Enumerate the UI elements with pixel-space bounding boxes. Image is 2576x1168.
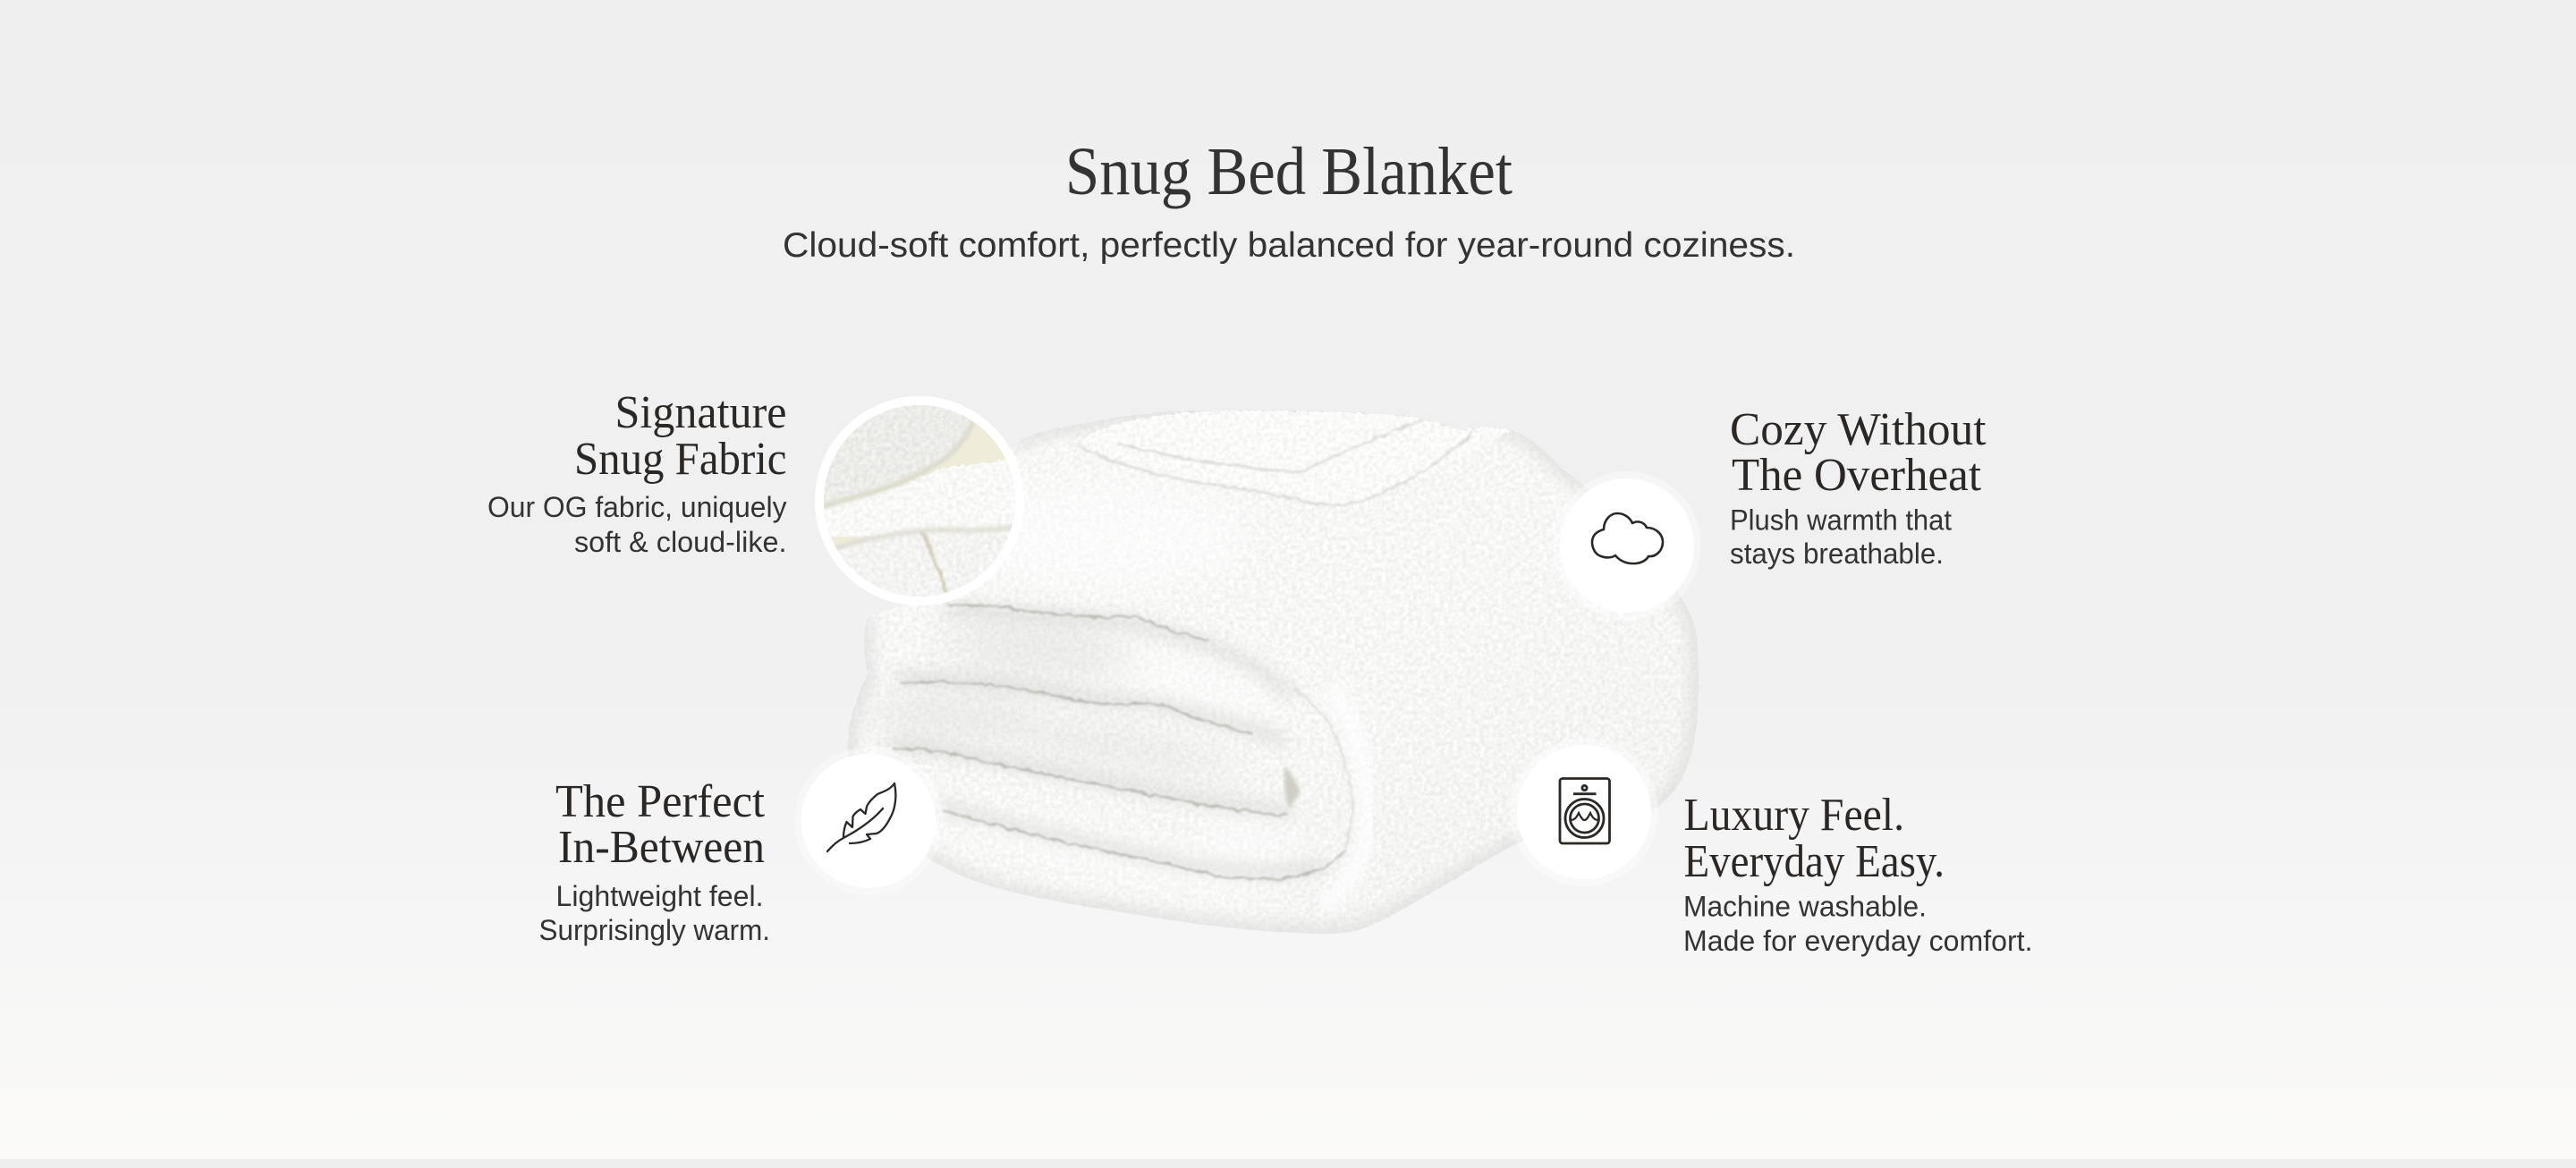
panel: the perfect in-between xyxy=(538,747,943,946)
icon: cloud xyxy=(1553,471,1701,620)
heading: The Perfect xyxy=(555,776,766,827)
top flap of blanket xyxy=(1079,410,1512,504)
description xyxy=(1683,891,2032,957)
heading xyxy=(574,387,787,485)
description: Machine washable. xyxy=(1683,891,1927,923)
heading xyxy=(1730,404,1987,501)
description: soft & cloud-like. xyxy=(574,526,787,558)
heading xyxy=(1683,790,1945,887)
heading: Signature xyxy=(615,387,787,438)
icon: washing machine xyxy=(1510,738,1658,886)
description: Lightweight feel. xyxy=(556,880,764,912)
title: Snug Bed Blanket xyxy=(1065,134,1513,209)
panel: cozy without the overheat xyxy=(1553,404,1987,620)
subtitle: Cloud-soft comfort, perfectly balanced for year-round coziness. xyxy=(783,226,1795,265)
soft edge shading xyxy=(847,410,1699,934)
blanket shading and fold lines xyxy=(847,410,1699,934)
description xyxy=(538,880,770,946)
description: Made for everyday comfort. xyxy=(1683,925,2032,957)
description xyxy=(1730,504,1952,570)
white rim around the roll xyxy=(1324,693,1368,905)
description: Plush warmth that xyxy=(1730,504,1952,537)
heading: Everyday Easy. xyxy=(1683,836,1945,887)
description: stays breathable. xyxy=(1730,537,1944,570)
heading: In-Between xyxy=(558,822,765,873)
heading: Luxury Feel. xyxy=(1683,790,1904,841)
panel: signature snug fabric xyxy=(487,387,1024,608)
blanket body xyxy=(847,410,1699,934)
heading xyxy=(555,776,766,873)
description: Our OG fabric, uniquely xyxy=(487,491,787,523)
heading: Snug Fabric xyxy=(574,434,787,485)
description xyxy=(487,491,787,558)
panel: luxury feel everyday easy xyxy=(1510,738,2032,957)
roll pocket xyxy=(1284,766,1300,808)
icon: feather xyxy=(794,747,943,895)
heading: The Overheat xyxy=(1732,450,1982,501)
fabric close-up circle xyxy=(815,396,1024,608)
folded blanket xyxy=(847,410,1699,934)
description: Surprisingly warm. xyxy=(538,914,770,946)
heading: Cozy Without xyxy=(1730,404,1987,455)
